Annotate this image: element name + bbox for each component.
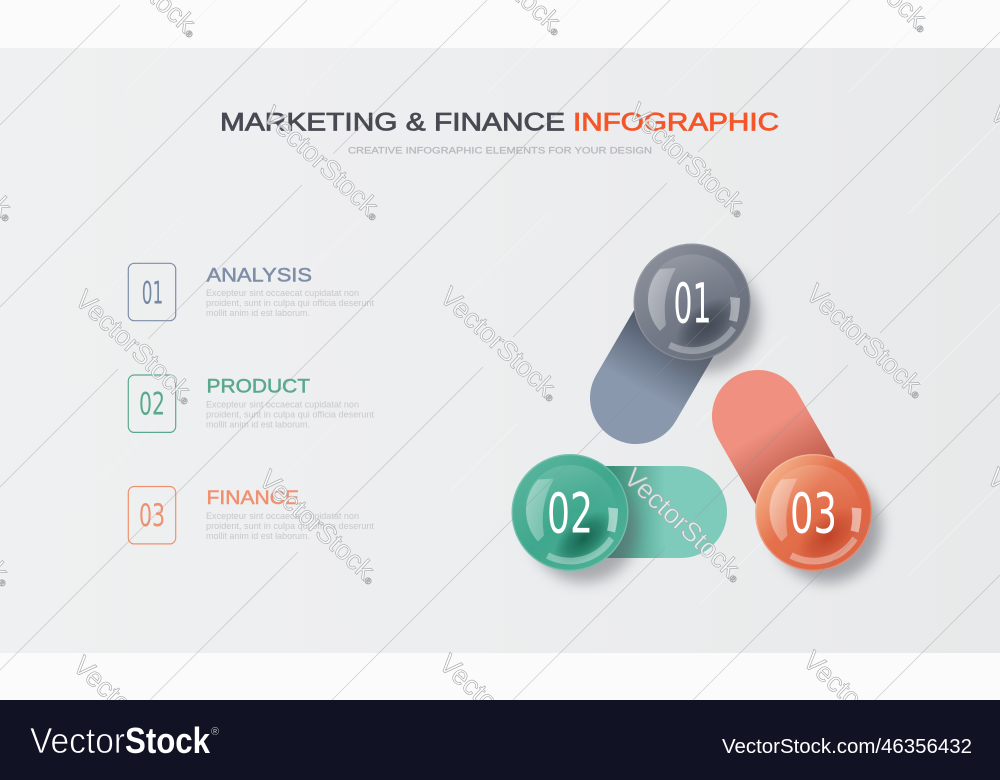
number box 02: 02 xyxy=(139,386,165,422)
heading: product: PRODUCT xyxy=(206,376,310,398)
sphere 03 xyxy=(755,454,882,582)
number 02: 02 xyxy=(547,482,593,546)
number box 01: 01 xyxy=(142,275,163,311)
watermarks: VectorStock® xyxy=(618,462,750,588)
description: finance xyxy=(206,511,374,542)
description: product: Excepteur sint occaecat cupidatat non xyxy=(206,400,359,410)
footer image id: VectorStock.com/46356432 xyxy=(722,736,972,758)
pill 01: slate xyxy=(636,302,692,398)
pill 03: coral xyxy=(758,416,813,512)
footer logo: ® xyxy=(211,726,219,738)
description: product xyxy=(206,400,374,430)
description: finance: proident, sunt in culpa qui officia deserunt xyxy=(206,521,374,532)
description: finance: Excepteur sint occaecat cupidatat non xyxy=(206,511,359,522)
title: MARKETING & FINANCE xyxy=(220,108,565,136)
watermarks: VectorStock® xyxy=(433,648,565,774)
description: product: mollit anim id est laborum. xyxy=(206,420,310,430)
number box 03 xyxy=(128,486,176,544)
watermarks: VectorStock® xyxy=(800,278,932,404)
footer logo: Vector xyxy=(30,720,125,761)
watermarks: VectorStock® xyxy=(257,100,389,226)
sphere 02 xyxy=(512,454,638,582)
heading: finance: FINANCE xyxy=(206,488,299,509)
heading: analysis: ANALYSIS xyxy=(206,266,312,286)
background panel xyxy=(0,48,1000,653)
legend item 01: analysis xyxy=(128,263,374,321)
footer logo xyxy=(30,720,219,761)
number box 02 xyxy=(128,375,176,432)
footer bar xyxy=(0,700,1000,780)
number 03: 03 xyxy=(790,482,837,546)
sphere 01 xyxy=(634,244,760,372)
description: analysis: mollit anim id est laborum. xyxy=(206,308,310,319)
number box 03: 03 xyxy=(139,498,165,534)
title xyxy=(220,108,779,136)
legend item 03: finance xyxy=(128,486,374,544)
watermarks: VectorStock® xyxy=(253,464,385,590)
title: INFOGRAPHIC xyxy=(573,108,779,136)
footer logo: Stock xyxy=(125,720,211,761)
watermarks: VectorStock® xyxy=(622,97,754,223)
watermarks: VectorStock® xyxy=(67,650,199,776)
description: analysis: Excepteur sint occaecat cupidatat non xyxy=(206,288,359,299)
description: analysis: proident, sunt in culpa qui officia deserunt xyxy=(206,298,374,309)
pill 02: teal xyxy=(570,466,681,558)
number box 01 xyxy=(128,263,176,321)
number 01: 01 xyxy=(674,271,712,335)
watermarks: VectorStock® xyxy=(797,645,929,771)
legend item 02: product xyxy=(128,375,374,432)
description: analysis xyxy=(206,288,374,319)
watermarks: VectorStock® xyxy=(434,281,566,407)
subtitle: CREATIVE INFOGRAPHIC ELEMENTS FOR YOUR DESIGN xyxy=(348,146,652,156)
description: finance: mollit anim id est laborum. xyxy=(206,531,310,542)
description: product: proident, sunt in culpa qui officia deserunt xyxy=(206,410,374,420)
watermarks: VectorStock® xyxy=(69,284,201,410)
